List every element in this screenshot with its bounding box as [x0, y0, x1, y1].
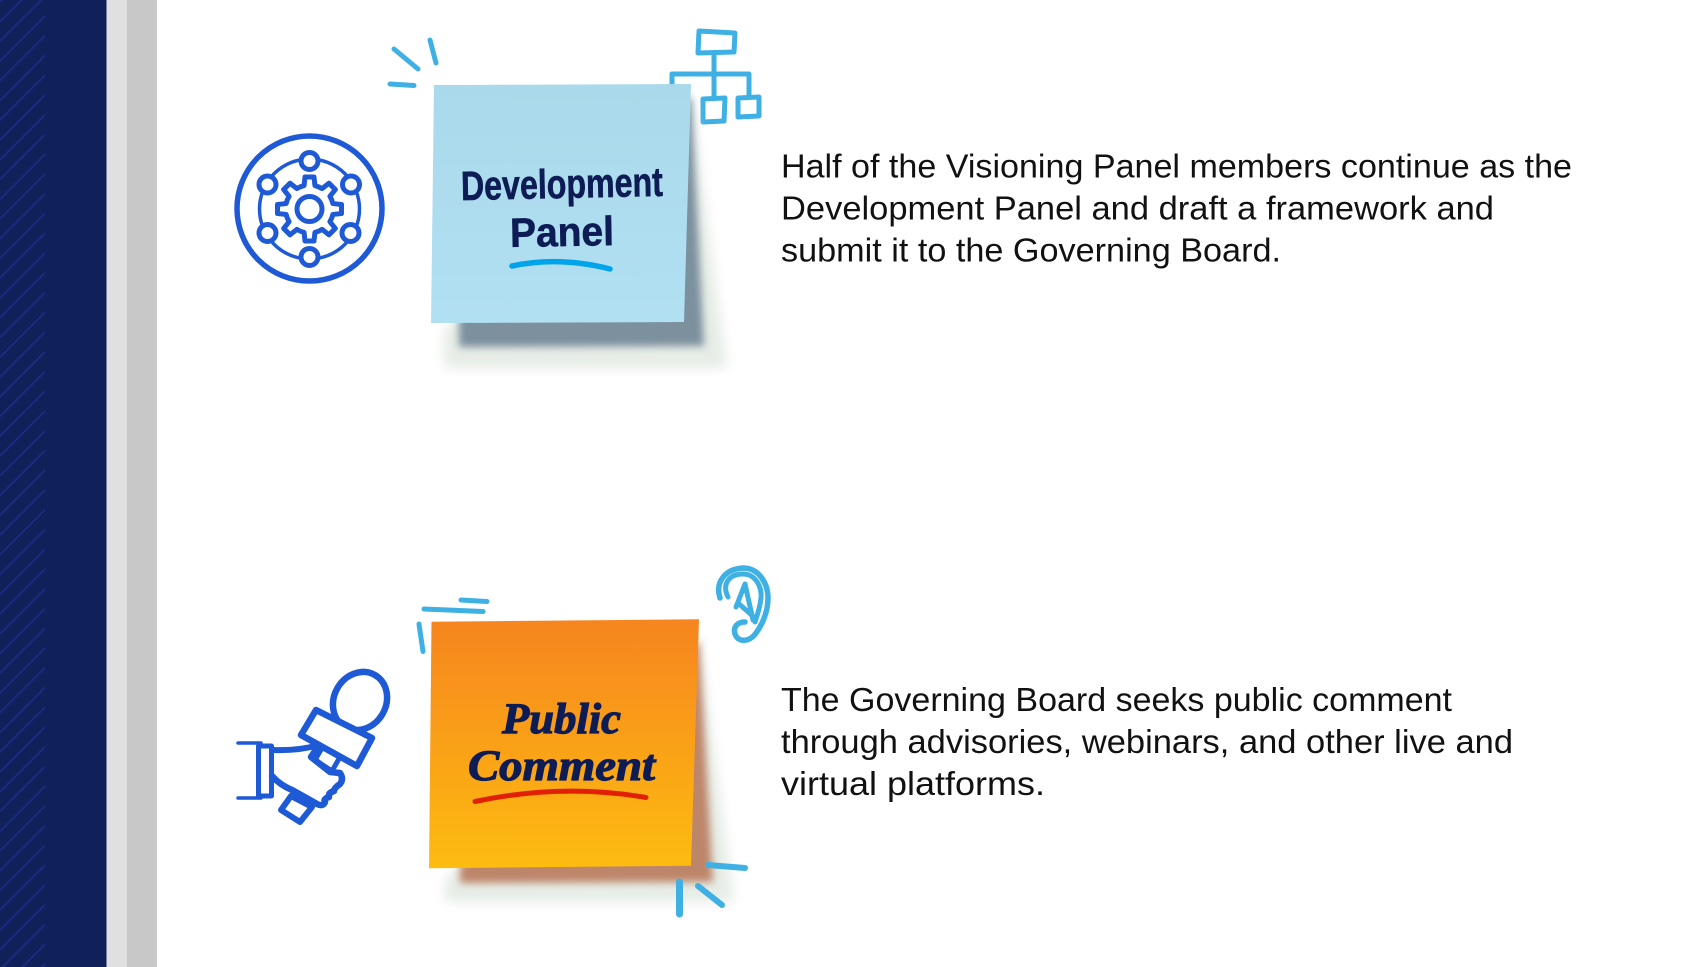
text: Development Panel description: Development Panel and draft a framework and	[781, 190, 1494, 228]
underline: blue	[512, 262, 610, 269]
heading: Development Panel: Development	[460, 159, 664, 209]
sticky note: Public Comment	[429, 619, 699, 868]
icon: org chart	[672, 31, 759, 122]
text: Development Panel description: Half of the Visioning Panel members continue as the	[781, 149, 1572, 186]
heading: Public Comment: Public	[501, 696, 621, 743]
text: Public Comment description: through advisories, webinars, and other live and	[781, 724, 1513, 761]
heading: Public Comment: Comment	[468, 743, 657, 790]
text: Public Comment description	[781, 682, 1513, 803]
underline: red	[475, 791, 646, 802]
text: Development Panel description	[781, 149, 1572, 270]
icon: sparks around orange note	[419, 600, 487, 652]
heading: Development Panel	[460, 159, 664, 256]
icon: sparks bottom-right of orange note	[680, 865, 745, 914]
icon: hand holding microphone	[238, 662, 398, 822]
icon: sparks top-left of blue note	[390, 40, 436, 86]
icon: gear network	[237, 136, 382, 281]
sticky note shadow: orange note	[445, 640, 734, 902]
sticky note shadow: blue note	[444, 95, 727, 368]
heading: Public Comment	[468, 696, 657, 790]
sidebar stripes	[0, 0, 157, 967]
heading: Development Panel: Panel	[510, 208, 614, 256]
text: Public Comment description: The Governing Board seeks public comment	[781, 682, 1453, 719]
text: Public Comment description: virtual platforms.	[781, 766, 1045, 803]
icon: ear	[719, 568, 768, 640]
sticky note: Development Panel	[431, 84, 691, 323]
text: Development Panel description: submit it to the Governing Board.	[781, 232, 1281, 270]
